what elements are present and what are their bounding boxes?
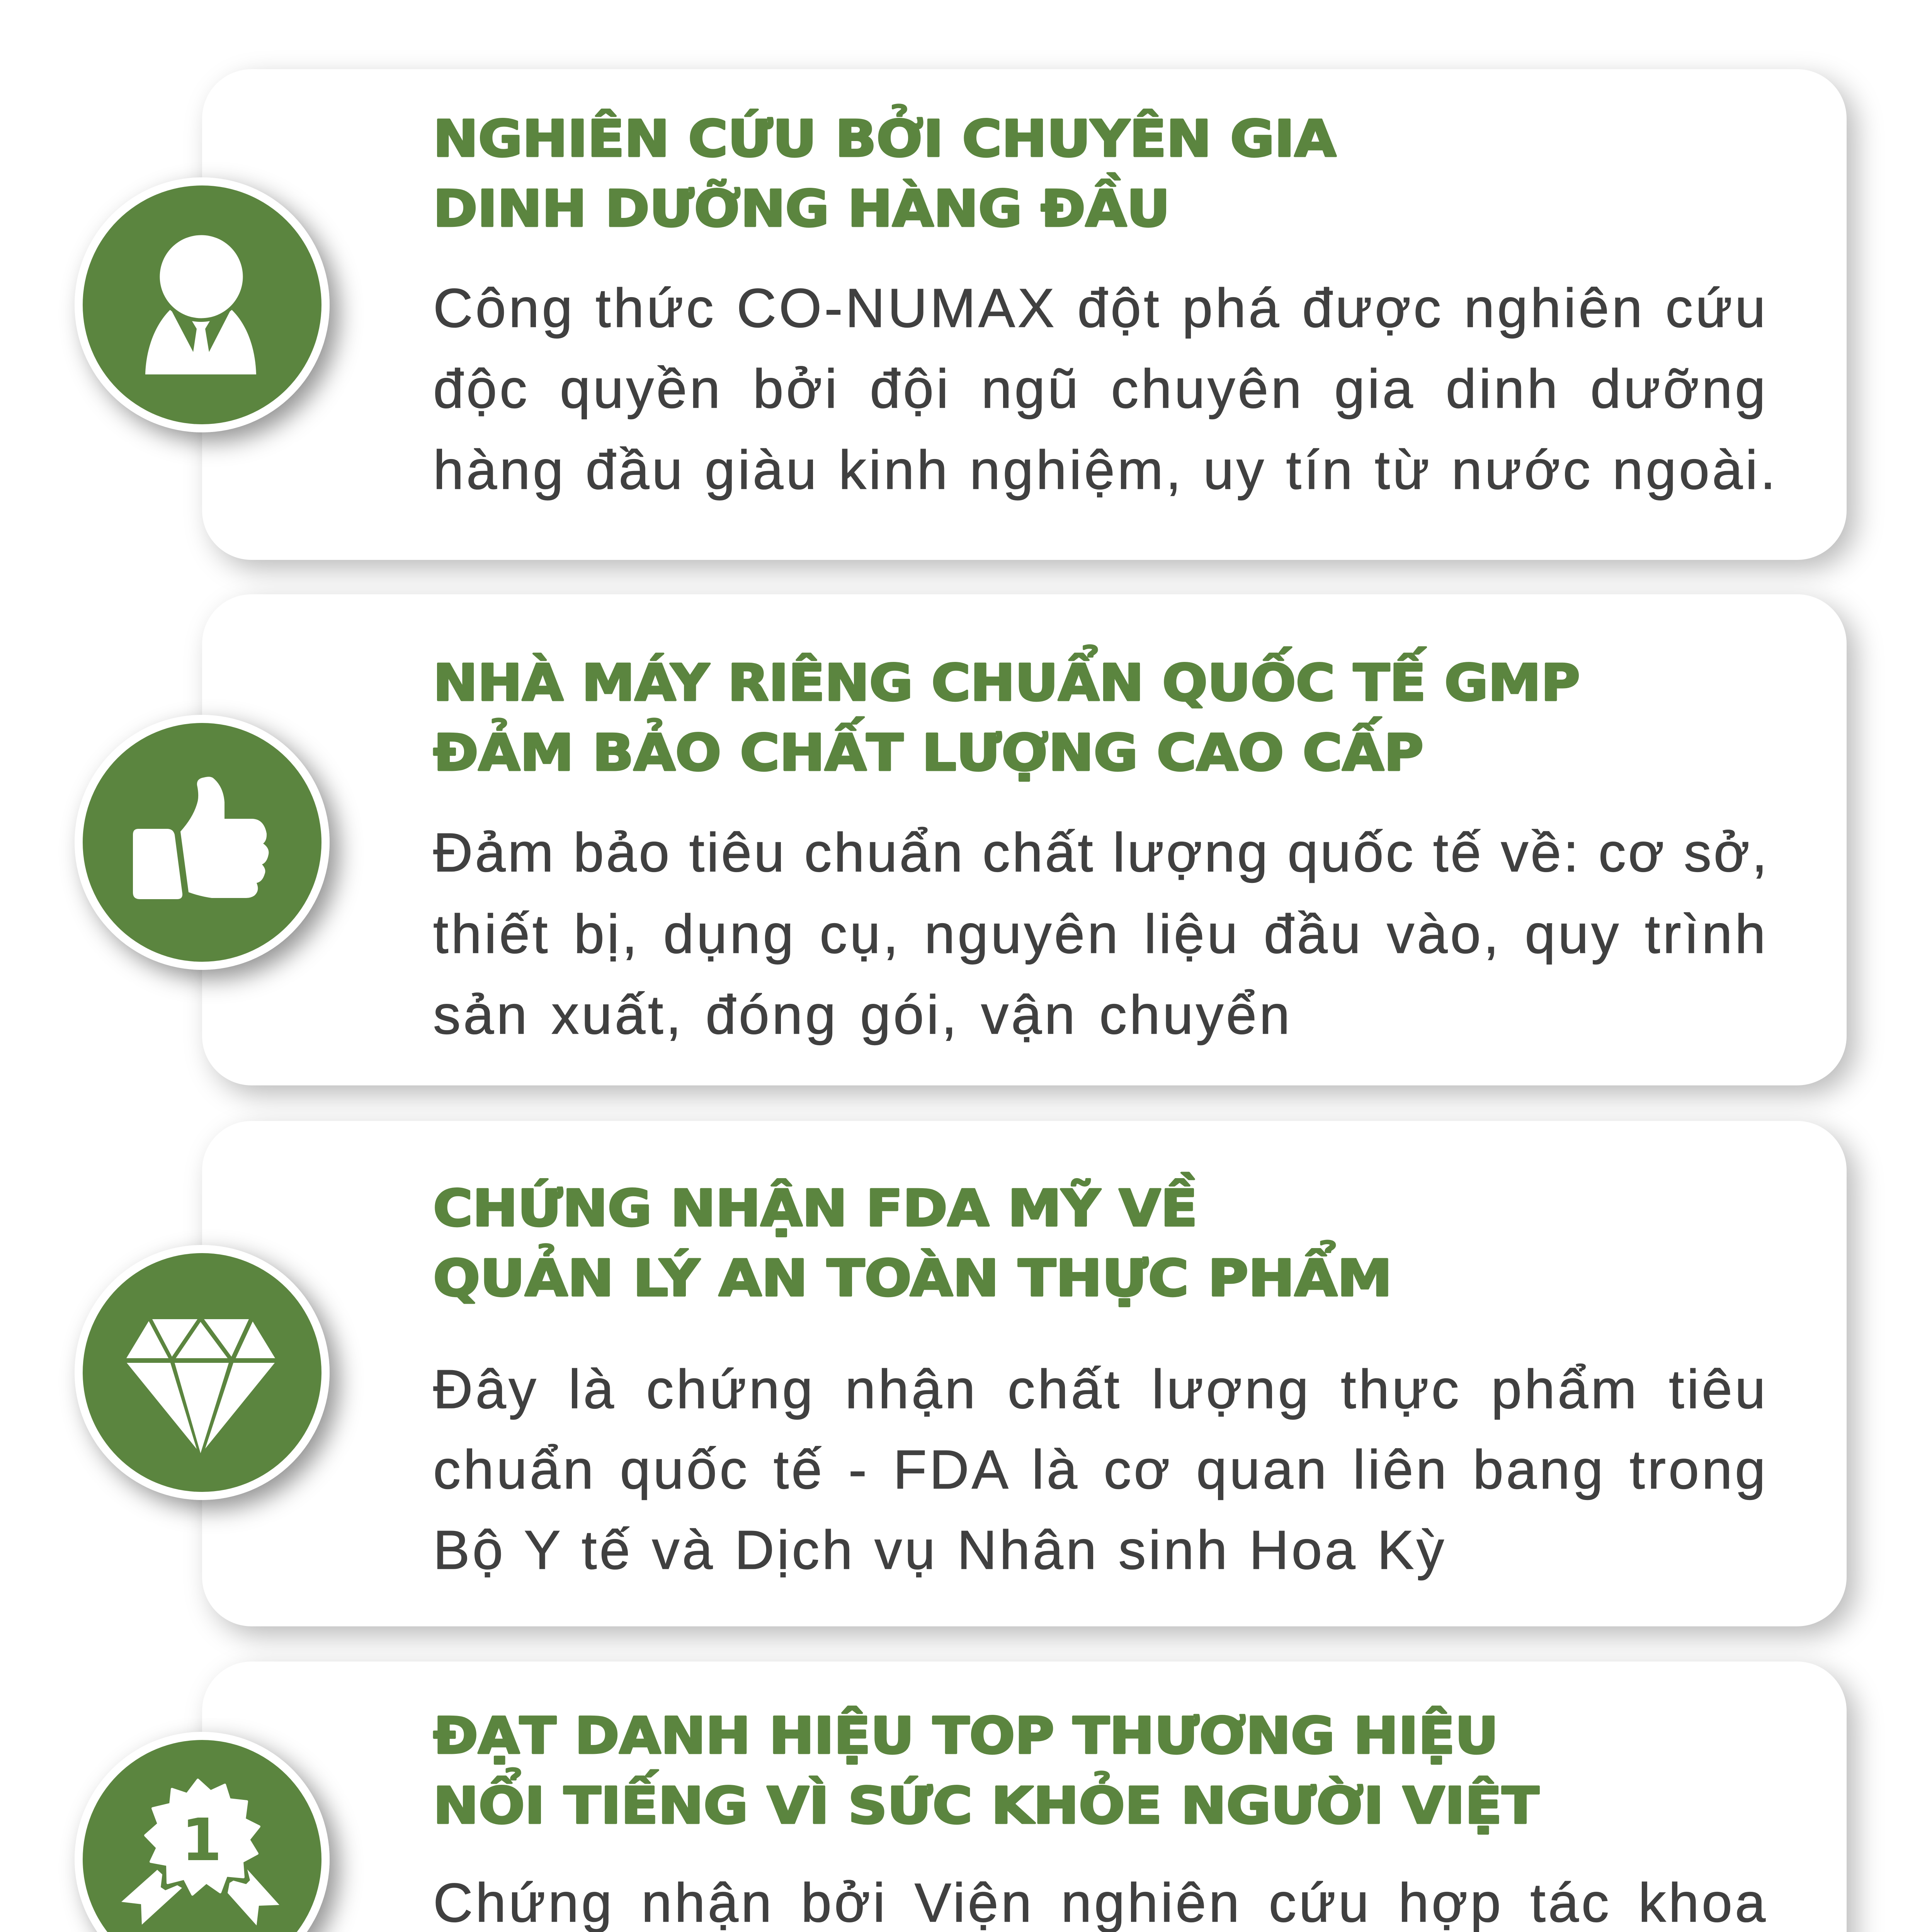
panel: top brand award xyxy=(202,1662,1847,1932)
heading: research by experts xyxy=(433,110,1631,241)
heading: GMP factory: ĐẢM BẢO CHẤT LƯỢNG CAO CẤP xyxy=(433,717,1423,782)
text block: GMP description: sản xuất, đóng gói, vận chuyển xyxy=(433,984,1293,1046)
heading: top brand award: NỔI TIẾNG VÌ SỨC KHỎE NGƯỜI VIỆT xyxy=(433,1768,1539,1835)
heading: FDA certification: QUẢN LÝ AN TOÀN THỰC PHẨM xyxy=(433,1241,1392,1308)
icon: diamond xyxy=(75,1245,330,1500)
text block: FDA description: Đây là chứng nhận chất lượng thực phẩm tiêu xyxy=(433,1359,1768,1420)
icon: number one award ribbon: 1 xyxy=(181,1806,222,1874)
text block: FDA description: Bộ Y tế và Dịch vụ Nhân sinh Hoa Kỳ xyxy=(433,1519,1447,1581)
heading: research by experts: DINH DƯỠNG HÀNG ĐẦU xyxy=(433,173,1170,238)
icon: expert person xyxy=(75,177,330,432)
panel: FDA certification xyxy=(202,1121,1847,1626)
text block: research description: hàng đầu giàu kinh nghiệm, uy tín từ nước ngoài. xyxy=(433,439,1778,501)
heading: GMP factory: NHÀ MÁY RIÊNG CHUẨN QUỐC TẾ GMP xyxy=(433,645,1580,712)
icon: number one award ribbon xyxy=(75,1732,330,1932)
text block: GMP description xyxy=(433,594,1824,1085)
heading: FDA certification xyxy=(433,1179,1631,1311)
text block: research description xyxy=(433,69,1824,560)
heading: research by experts: NGHIÊN CỨU BỞI CHUYÊN GIA xyxy=(433,104,1336,168)
heading: top brand award: ĐẠT DANH HIỆU TOP THƯƠNG HIỆU xyxy=(433,1706,1498,1765)
panel: research by experts xyxy=(202,69,1847,560)
icon: thumbs up xyxy=(75,715,330,970)
panel: GMP factory xyxy=(202,594,1847,1085)
heading: top brand award xyxy=(433,1707,1631,1838)
text block: GMP description: thiết bị, dụng cụ, nguyên liệu đầu vào, quy trình xyxy=(433,903,1768,965)
heading: FDA certification: CHỨNG NHẬN FDA MỸ VỀ xyxy=(433,1172,1197,1238)
text block: GMP description: Đảm bảo tiêu chuẩn chất lượng quốc tế về: cơ sở, xyxy=(433,822,1769,883)
heading: GMP factory xyxy=(433,654,1631,785)
text block: FDA description xyxy=(433,1121,1824,1626)
text block: award description: Chứng nhận bởi Viện nghiên cứu hợp tác khoa xyxy=(433,1872,1768,1932)
text block: FDA description: chuẩn quốc tế - FDA là cơ quan liên bang trong xyxy=(433,1439,1768,1500)
text block: research description: độc quyền bởi đội ngũ chuyên gia dinh dưỡng xyxy=(433,358,1768,420)
text block: research description: Công thức CO-NUMAX đột phá được nghiên cứu xyxy=(433,277,1768,339)
